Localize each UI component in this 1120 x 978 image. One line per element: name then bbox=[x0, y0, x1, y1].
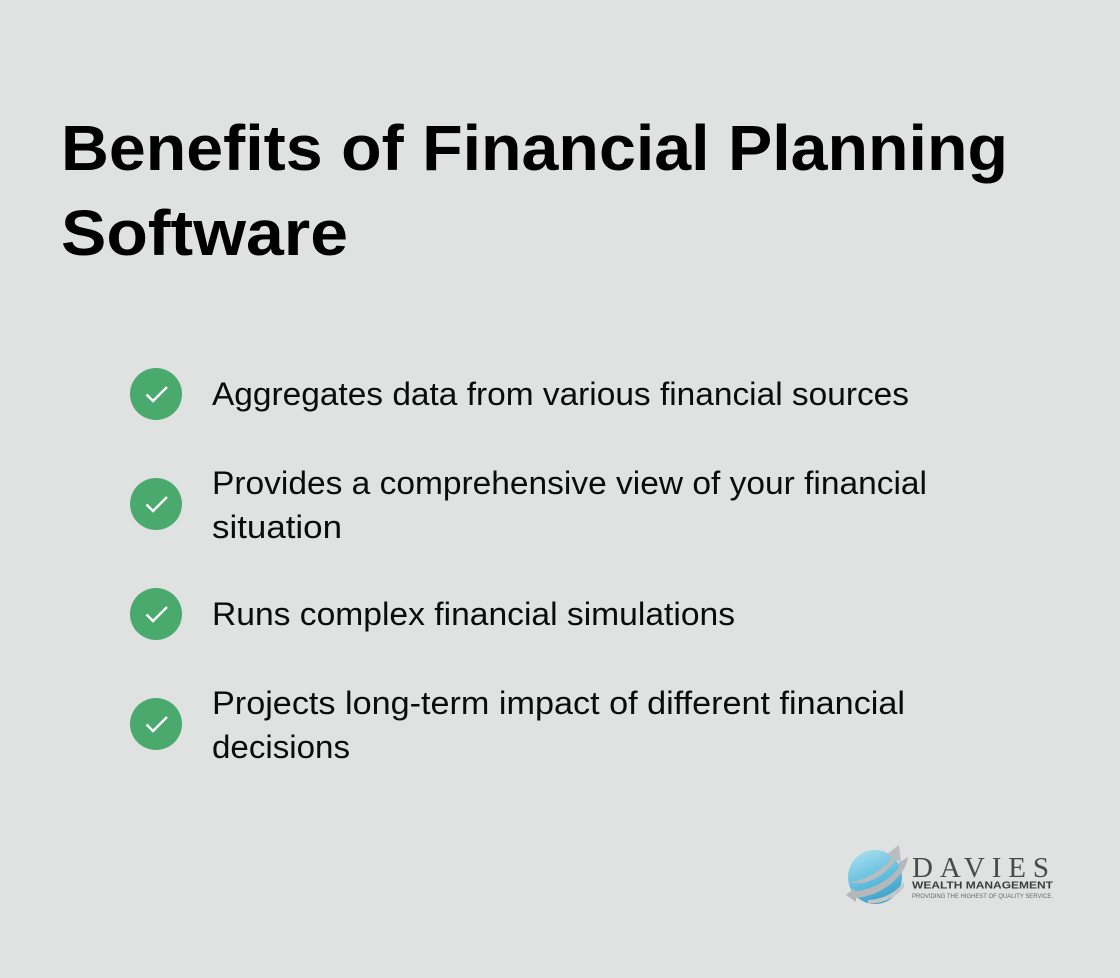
icon: globe with arrows bbox=[846, 845, 908, 904]
item: simulations: Runs complex financial simulations bbox=[212, 596, 735, 632]
logo: Davies Wealth Management: WEALTH MANAGEMENT bbox=[912, 880, 1053, 892]
wordmark: DAVIES bbox=[912, 852, 1049, 884]
item: long-term impact bbox=[130, 685, 905, 765]
title: Benefits of Financial Planning bbox=[61, 112, 1008, 184]
item: long-term impact: decisions bbox=[212, 729, 350, 765]
item: comprehensive view bbox=[130, 465, 927, 545]
item: comprehensive view: Provides a comprehensive view of your financial bbox=[212, 465, 927, 501]
title bbox=[61, 112, 1008, 269]
item: long-term impact: Projects long-term impact of different financial bbox=[212, 685, 905, 721]
item: comprehensive view: situation bbox=[212, 509, 342, 545]
title: Software bbox=[61, 197, 348, 269]
logo: Davies Wealth Management: PROVIDING THE HIGHEST OF QUALITY SERVICE. bbox=[912, 893, 1053, 900]
item: aggregates data: Aggregates data from various financial sources bbox=[212, 376, 909, 412]
item: aggregates data bbox=[130, 368, 909, 420]
item: simulations bbox=[130, 588, 735, 640]
logo: Davies Wealth Management bbox=[846, 845, 1053, 904]
benefits list bbox=[130, 368, 927, 765]
